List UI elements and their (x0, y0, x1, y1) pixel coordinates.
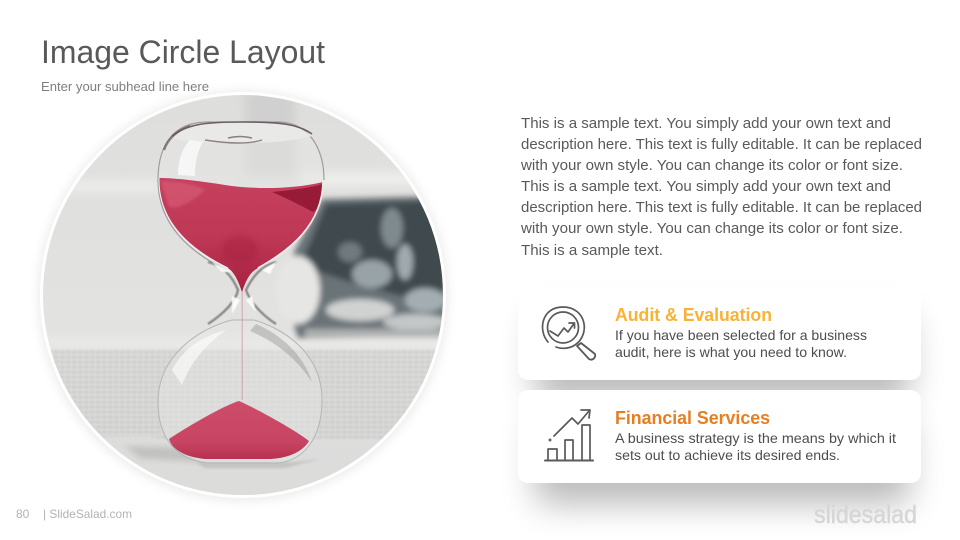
heading: Financial Services (615, 407, 770, 428)
icon: rising bar chart (545, 410, 593, 460)
dark picture patch (276, 196, 450, 338)
blurred newspaper background (74, 95, 410, 190)
card: Financial Services (518, 390, 921, 504)
footer brand text: | SlideSalad.com (43, 507, 132, 521)
description: audit, here is what you need to know. (615, 345, 847, 360)
description: If you have been selected for a business (615, 328, 867, 343)
description (615, 328, 867, 360)
newspaper text, lower (40, 350, 450, 438)
body paragraph: description here. This text is fully editable. It can be replaced (521, 200, 922, 216)
desk (104, 436, 358, 495)
description (615, 431, 896, 463)
logo wordmark: slidesalad (814, 501, 917, 529)
circular photo: hourglass on newspaper (39, 90, 450, 500)
title: Image Circle Layout (41, 34, 325, 70)
body paragraph: This is a sample text. You simply add your own text and (521, 179, 891, 195)
red sand lower (169, 401, 309, 459)
glass upper bulb (158, 122, 324, 292)
page number: 80 (16, 507, 30, 521)
heading: Audit & Evaluation (615, 304, 772, 325)
body paragraph: This is a sample text. (521, 243, 663, 259)
description: sets out to achieve its desired ends. (615, 448, 840, 463)
body paragraph: with your own style. You can change its color or font size. (520, 221, 903, 237)
glass lower bulb (158, 320, 322, 463)
icon: magnifier with trend line (543, 307, 595, 360)
description: A business strategy is the means by which it (615, 431, 896, 446)
glass neck (208, 262, 276, 324)
body paragraph (520, 116, 922, 259)
body paragraph: with your own style. You can change its color or font size. (520, 158, 903, 174)
body paragraph: This is a sample text. You simply add your own text and (521, 116, 891, 132)
body paragraph: description here. This text is fully editable. It can be replaced (521, 137, 922, 153)
subhead: Enter your subhead line here (41, 80, 209, 94)
card: Audit & Evaluation (518, 287, 921, 401)
falling sand stream (242, 288, 243, 400)
